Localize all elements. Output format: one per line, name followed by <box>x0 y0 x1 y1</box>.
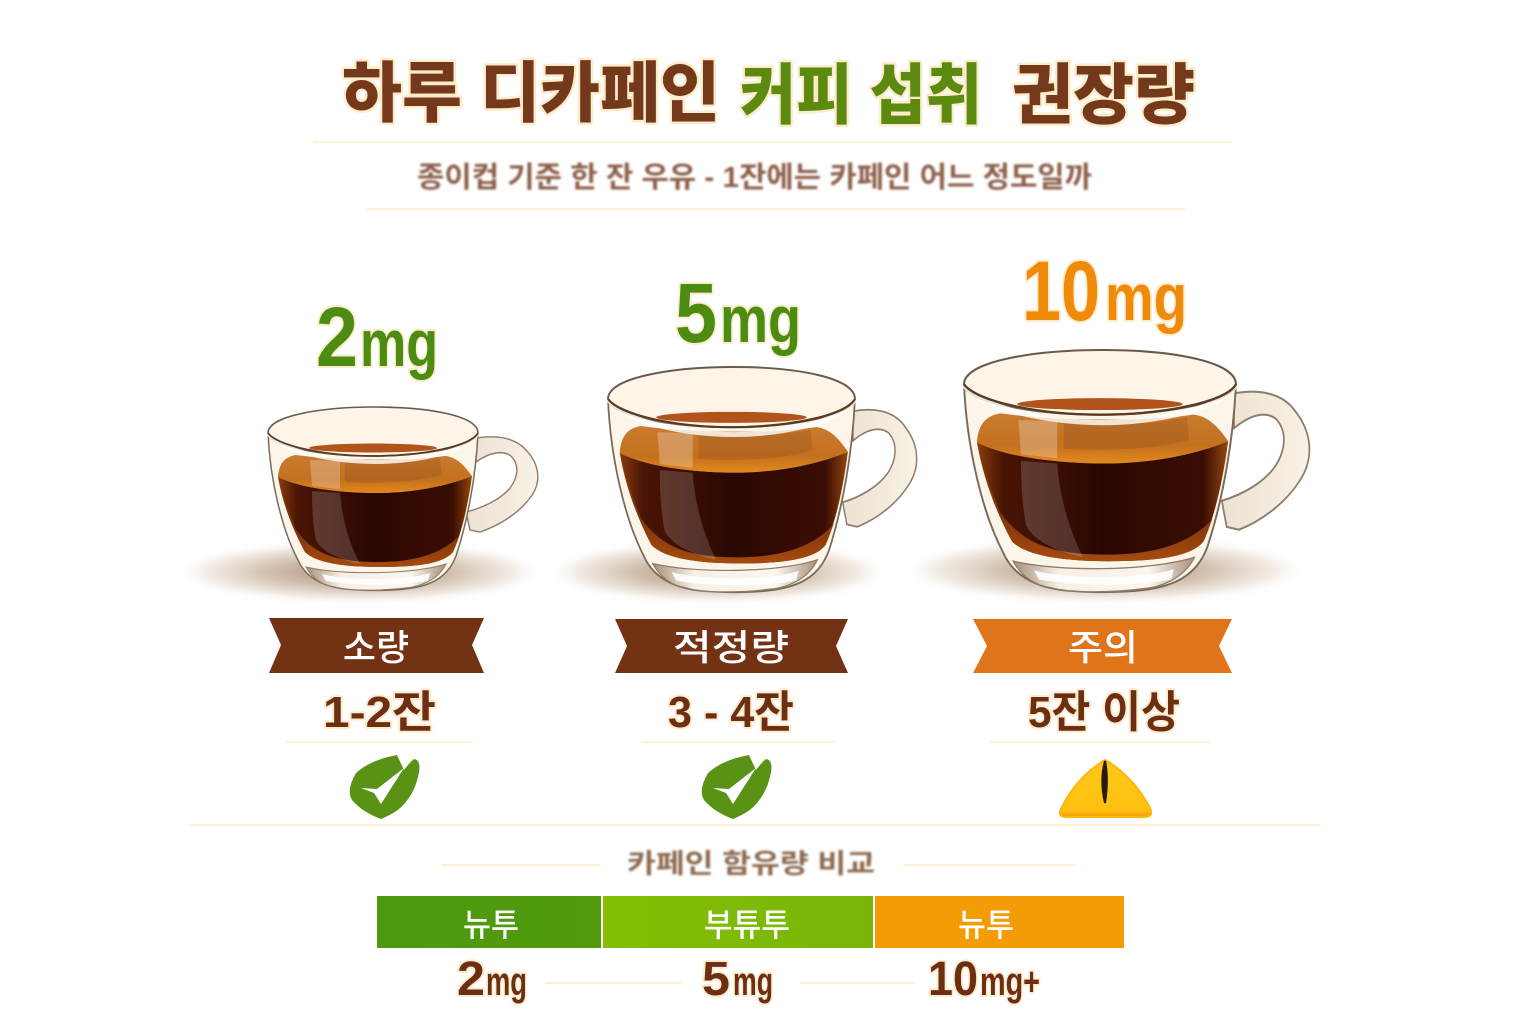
amount: 10mg <box>1022 244 1187 338</box>
cup shadow <box>553 542 883 602</box>
small cup handle <box>466 437 538 532</box>
comparison values: 10 <box>928 953 978 1006</box>
servings: 3-4 cups: 3 - 4잔 <box>668 688 794 737</box>
amount: 5mg: 5 <box>675 266 717 360</box>
comparison bar <box>377 896 1124 948</box>
ribbon: caution <box>973 619 1232 673</box>
title: 커피 섭취 <box>740 58 982 132</box>
medium coffee cup <box>608 367 855 592</box>
medium cup handle <box>843 410 917 527</box>
ribbon: small amount <box>269 618 484 673</box>
segment: high: 뉴투 <box>958 907 1014 943</box>
column: 5mg medium cup <box>553 266 917 819</box>
servings: 5 or more cups: 5잔 이상 <box>1028 688 1180 737</box>
large coffee cup <box>964 350 1236 592</box>
amount: 10mg: 10 <box>1022 244 1100 338</box>
segment: medium: 부튜투 <box>704 907 790 943</box>
section heading: comparison: 카페인 함유량 비교 <box>627 849 875 879</box>
column: 2mg small cup <box>182 290 538 819</box>
subtitle: 종이컵 기준 한 잔 우유 - 1잔에는 카페인 어느 정도일까 <box>417 161 1092 194</box>
comparison values: mg <box>486 960 527 1004</box>
title <box>342 56 1195 132</box>
icon: green check <box>702 755 771 819</box>
segment: high <box>875 896 1124 948</box>
cup shadow <box>909 538 1301 602</box>
amount: 2mg <box>316 290 438 384</box>
comparison values: mg+ <box>980 960 1040 1004</box>
amount: 2mg: 2 <box>316 290 358 384</box>
amount: 5mg: mg <box>720 282 801 356</box>
title: 권장량 <box>1012 58 1195 132</box>
amount: 5mg <box>675 266 801 360</box>
icon: warning triangle <box>1060 760 1151 817</box>
comparison values <box>457 953 1040 1006</box>
segment: medium <box>603 896 873 948</box>
segment: low <box>377 896 601 948</box>
comparison values: 5 <box>702 953 730 1006</box>
ribbon: moderate amount <box>615 619 848 673</box>
amount: 2mg: mg <box>360 306 438 380</box>
column: 10mg large cup <box>909 244 1309 817</box>
small coffee cup <box>268 407 478 590</box>
cup shadow <box>182 542 538 602</box>
segment: low: 뉴투 <box>463 907 519 943</box>
large cup handle <box>1222 392 1309 530</box>
ribbon: caution: 주의 <box>1068 627 1138 668</box>
servings: 1-2 cups: 1-2잔 <box>323 688 436 737</box>
icon: green check <box>350 755 419 819</box>
ribbon: small amount: 소량 <box>343 627 409 668</box>
comparison values: mg <box>733 960 773 1004</box>
ribbon: moderate amount: 적정량 <box>673 627 789 668</box>
comparison values: 2 <box>457 953 485 1006</box>
title: 하루 디카페인 <box>342 56 720 130</box>
amount: 10mg: mg <box>1105 260 1187 334</box>
